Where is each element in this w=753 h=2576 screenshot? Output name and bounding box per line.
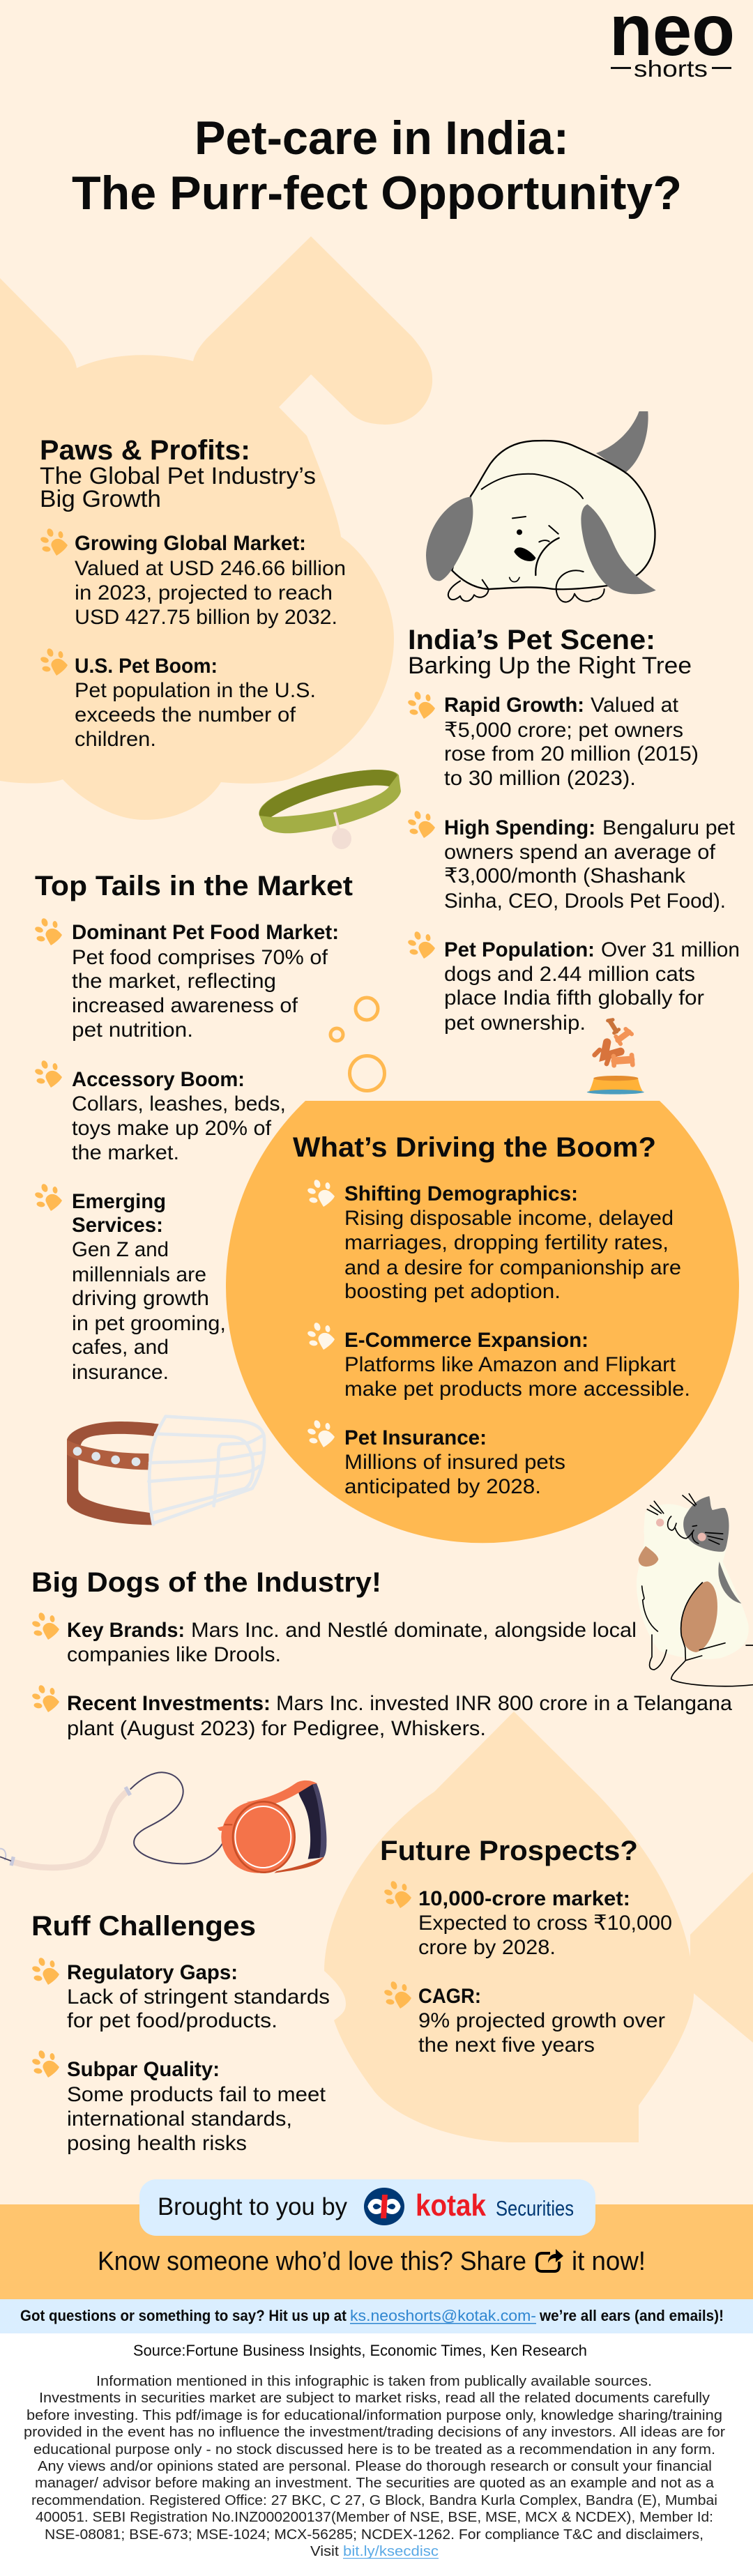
panel: ruff challenges — [31, 1911, 330, 2155]
text: brought to you by: Brought to you by — [158, 2193, 347, 2220]
text: regulatory gaps — [67, 1961, 330, 2032]
text: high spending: Bengaluru pet — [602, 816, 736, 839]
text: high spending: owners spend an average of — [444, 841, 716, 864]
text: emerging services: insurance. — [72, 1361, 169, 1384]
text: disclaimer: recommendation. Registered Office: 27 BKC, C 27, G Block, Bandra Kurla Complex, Bandra (E), Mumbai — [31, 2493, 717, 2508]
text: emerging services: Gen Z and — [72, 1238, 169, 1261]
heading: what's driving the boom: What’s Driving the Boom? — [293, 1132, 656, 1163]
text: us pet boom: children. — [75, 728, 156, 751]
text: e-commerce expansion: Platforms like Amazon and Flipkart — [344, 1353, 676, 1376]
icon: kotak logo — [364, 2188, 404, 2225]
illustration: dog — [426, 411, 656, 602]
text: disclaimer: before investing. This pdf/image is for educational/information purpose only, knowledge sharing/training — [26, 2408, 722, 2423]
background paw shape: top left — [0, 236, 432, 820]
text: cagr — [418, 1985, 665, 2057]
text: pet insurance: anticipated by 2028. — [344, 1475, 541, 1498]
icon: paw — [31, 1684, 59, 1712]
title: The Purr-fect Opportunity? — [72, 167, 682, 220]
text: key brands: Key Brands: — [67, 1619, 185, 1642]
text: disclaimer: Information mentioned in this infographic is taken from publically available sources. — [96, 2374, 652, 2389]
panel: top tails in the market — [34, 871, 353, 1384]
text: dominant pet food market: increased awareness of — [72, 994, 298, 1017]
text: shifting demographics: and a desire for companionship are — [344, 1256, 681, 1279]
text: emerging services: in pet grooming, — [72, 1312, 226, 1335]
icon: white paw — [307, 1419, 335, 1447]
heading: india's pet scene: Barking Up the Right Tree — [408, 653, 692, 679]
background paw shape: future prospects — [324, 1712, 753, 2142]
text: accessory boom: toys make up 20% of — [72, 1117, 272, 1140]
icon: paw — [34, 917, 62, 945]
title — [72, 112, 682, 220]
text: subpar quality — [67, 2058, 326, 2155]
text: emerging services: Emerging — [72, 1190, 166, 1213]
text: disclaimer: bit.ly/ksecdisc — [343, 2544, 439, 2559]
text: emerging services: millennials are — [72, 1263, 206, 1286]
text: shifting demographics: marriages, dropping fertility rates, — [344, 1231, 669, 1254]
text: accessory boom: Collars, leashes, beds, — [72, 1092, 286, 1115]
text: us pet boom: U.S. Pet Boom: — [75, 655, 218, 678]
icon: paw — [31, 2050, 59, 2078]
text: key brands — [67, 1619, 637, 1666]
text: 10,000-crore market: Expected to cross ₹10,000 — [418, 1912, 672, 1935]
text: key brands: Mars Inc. and Nestlé dominate, alongside local — [191, 1619, 637, 1642]
text: dominant pet food market: the market, reflecting — [72, 970, 276, 993]
text: shifting demographics: Shifting Demographics: — [344, 1182, 578, 1205]
text: disclaimer — [24, 2374, 725, 2559]
text: disclaimer: 400051. SEBI Registration No.INZ000200137(Member of NSE, BSE, MSE, MCX & NCDEX), Member Id: — [36, 2510, 713, 2525]
text: growing global market: Valued at USD 246.66 billion — [75, 557, 346, 580]
text: dominant pet food market: pet nutrition. — [72, 1019, 193, 1042]
text: rapid growth: rose from 20 million (2015) — [444, 742, 699, 765]
text: emerging services: cafes, and — [72, 1336, 169, 1359]
heading: ruff challenges: Ruff Challenges — [31, 1911, 256, 1942]
panel: future prospects — [380, 1836, 672, 2057]
text: high spending — [444, 816, 736, 913]
text: cagr: the next five years — [418, 2034, 595, 2057]
text: regulatory gaps: Lack of stringent standards — [67, 1986, 330, 2009]
text: growing global market: in 2023, projected to reach — [75, 581, 333, 604]
decoration: bubbles — [330, 998, 385, 1090]
heading: paws and profits: Paws & Profits: — [40, 435, 250, 466]
illustration: cat — [637, 1494, 753, 1686]
text: e-commerce expansion: E-Commerce Expansion: — [344, 1329, 588, 1352]
text: e-commerce expansion — [344, 1329, 690, 1401]
text: pet population: place India fifth globally for — [444, 986, 704, 1009]
text: accessory boom — [72, 1068, 286, 1164]
text: recent investments: Mars Inc. invested INR 800 crore in a Telangana — [276, 1692, 732, 1715]
panel: paws and profits — [40, 435, 346, 751]
text: accessory boom: the market. — [72, 1141, 179, 1164]
text: subpar quality: Some products fail to meet — [67, 2083, 326, 2106]
panel: what's driving the boom — [226, 1101, 739, 1543]
link: email: ks.neoshorts@kotak.com- — [350, 2307, 536, 2324]
text: disclaimer: Investments in securities market are subject to market risks, read all the related documents carefully — [39, 2391, 710, 2406]
panel: big dogs of the industry — [31, 1567, 732, 1740]
text: cagr: 9% projected growth over — [418, 2009, 665, 2032]
text: subpar quality: posing health risks — [67, 2132, 247, 2155]
text: dominant pet food market: Pet food comprises 70% of — [72, 946, 328, 969]
heading: india's pet scene — [408, 625, 692, 679]
illustration: food bowl — [587, 1020, 644, 1095]
text: emerging services: Services: — [72, 1214, 163, 1237]
text: dominant pet food market — [72, 921, 339, 1042]
illustration: retractable leash — [0, 1772, 327, 1873]
heading: india's pet scene: India’s Pet Scene: — [408, 625, 655, 655]
text: securities: Securities — [496, 2196, 574, 2220]
text: subpar quality: Subpar Quality: — [67, 2058, 220, 2081]
text: pet insurance: Millions of insured pets — [344, 1451, 565, 1474]
panel: india's pet scene — [407, 625, 740, 1035]
text: rapid growth — [444, 694, 699, 790]
text: regulatory gaps: Regulatory Gaps: — [67, 1961, 238, 1984]
icon: paw — [40, 648, 68, 676]
sponsor pill: kotak securities — [139, 2179, 595, 2236]
text: recent investments: plant (August 2023) for Pedigree, Whiskers. — [67, 1717, 486, 1740]
text: rapid growth: to 30 million (2023). — [444, 767, 636, 790]
icon: paw — [40, 528, 68, 556]
text: recent investments: Recent Investments: — [67, 1692, 271, 1715]
text: kotak: kotak — [416, 2188, 486, 2223]
text: 10,000-crore market: 10,000-crore market: — [418, 1887, 630, 1910]
text: subpar quality: international standards, — [67, 2108, 292, 2131]
text: disclaimer: Visit — [310, 2544, 339, 2559]
illustration: muzzle — [67, 1417, 264, 1525]
icon: share — [537, 2249, 563, 2271]
text: disclaimer: NSE-08081; BSE-673; MSE-1024; MCX-56285; NCDEX-1262. For compliance T&C and disclaimers, — [45, 2527, 703, 2543]
text: all ears: we’re all ears (and emails)! — [539, 2307, 724, 2324]
text: emerging services — [72, 1190, 226, 1384]
icon: paw — [31, 1957, 59, 1985]
text: pet population: dogs and 2.44 million cats — [444, 963, 695, 986]
text: high spending: Sinha, CEO, Drools Pet Food). — [444, 890, 726, 913]
text: pet population — [444, 938, 740, 1035]
title: Pet-care in India: — [195, 112, 569, 165]
text: shifting demographics: Rising disposable income, delayed — [344, 1207, 674, 1230]
text: it now: it now! — [572, 2247, 646, 2276]
text: pet population: Over 31 million — [601, 938, 740, 961]
text: high spending: High Spending: — [444, 816, 595, 839]
icon: paw — [383, 1880, 411, 1908]
text: disclaimer: provided in the event has no influence the investment/trading decisions of any investors. All ideas are for — [24, 2425, 725, 2440]
heading: paws and profits — [40, 435, 316, 512]
heading: paws and profits: The Global Pet Industry’s — [40, 463, 316, 489]
text: 10,000-crore market — [418, 1887, 672, 1959]
text: pet population: Pet Population: — [444, 938, 595, 961]
icon: paw — [34, 1183, 62, 1211]
text: pet population: pet ownership. — [444, 1012, 586, 1035]
icon: paw — [31, 1612, 59, 1640]
icon: paw — [383, 1981, 411, 2009]
icon: paw — [407, 691, 435, 719]
icon: paw — [407, 931, 435, 959]
text: source: Source:Fortune Business Insights, Economic Times, Ken Research — [133, 2342, 587, 2359]
heading: future prospects: Future Prospects? — [380, 1836, 638, 1866]
text: dominant pet food market: Dominant Pet Food Market: — [72, 921, 339, 944]
text: accessory boom: Accessory Boom: — [72, 1068, 245, 1091]
text: disclaimer: Any views and/or opinions stated are personal. Please do thorough research or consult your financial — [38, 2459, 712, 2474]
text: pet insurance: Pet Insurance: — [344, 1426, 487, 1449]
background bowl shape — [226, 1101, 739, 1543]
heading: top tails: Top Tails in the Market — [35, 871, 353, 901]
text: us pet boom — [75, 655, 316, 751]
text: disclaimer: manager/ advisor before making an investment. The securities are quoted as an example and not as a — [35, 2476, 715, 2491]
heading: paws and profits: Big Growth — [40, 486, 161, 512]
text: shifting demographics — [344, 1182, 681, 1303]
text: cagr: CAGR: — [418, 1985, 481, 2008]
text: pet insurance — [344, 1426, 565, 1498]
text: key brands: companies like Drools. — [67, 1643, 281, 1666]
text: recent investments — [67, 1692, 732, 1740]
footer band: share — [0, 2204, 753, 2299]
text: growing global market — [75, 532, 346, 629]
text: got questions: Got questions or something to say? Hit us up at — [20, 2307, 347, 2324]
text: know someone: Know someone who’d love this? Share — [98, 2247, 526, 2276]
text: us pet boom: Pet population in the U.S. — [75, 679, 316, 702]
text: e-commerce expansion: make pet products more accessible. — [344, 1378, 690, 1401]
icon: paw — [34, 1060, 62, 1088]
text: emerging services: driving growth — [72, 1287, 209, 1310]
icon: white paw — [307, 1179, 335, 1207]
heading: big dogs: Big Dogs of the Industry! — [31, 1567, 381, 1598]
text: growing global market: Growing Global Market: — [75, 532, 306, 555]
text: growing global market: USD 427.75 billion by 2032. — [75, 606, 337, 629]
contact band — [0, 2299, 753, 2333]
text: us pet boom: exceeds the number of — [75, 703, 296, 726]
icon: paw — [407, 810, 435, 838]
text: rapid growth: Rapid Growth: — [444, 694, 584, 717]
text: 10,000-crore market: crore by 2028. — [418, 1936, 556, 1959]
text: disclaimer: educational purpose only - no stock discussed here is to be treated as a recommendation in any form. — [33, 2442, 715, 2457]
text: shifting demographics: boosting pet adoption. — [344, 1280, 561, 1303]
text: rapid growth: Valued at — [591, 694, 679, 717]
text: rapid growth: ₹5,000 crore; pet owners — [444, 719, 683, 742]
icon: white paw — [307, 1322, 335, 1350]
logo: neo shorts: shorts — [634, 56, 708, 82]
text: high spending: ₹3,000/month (Shashank — [444, 864, 686, 887]
white footer background — [0, 2333, 753, 2576]
illustration: green collar — [259, 770, 401, 849]
text: regulatory gaps: for pet food/products. — [67, 2009, 277, 2032]
